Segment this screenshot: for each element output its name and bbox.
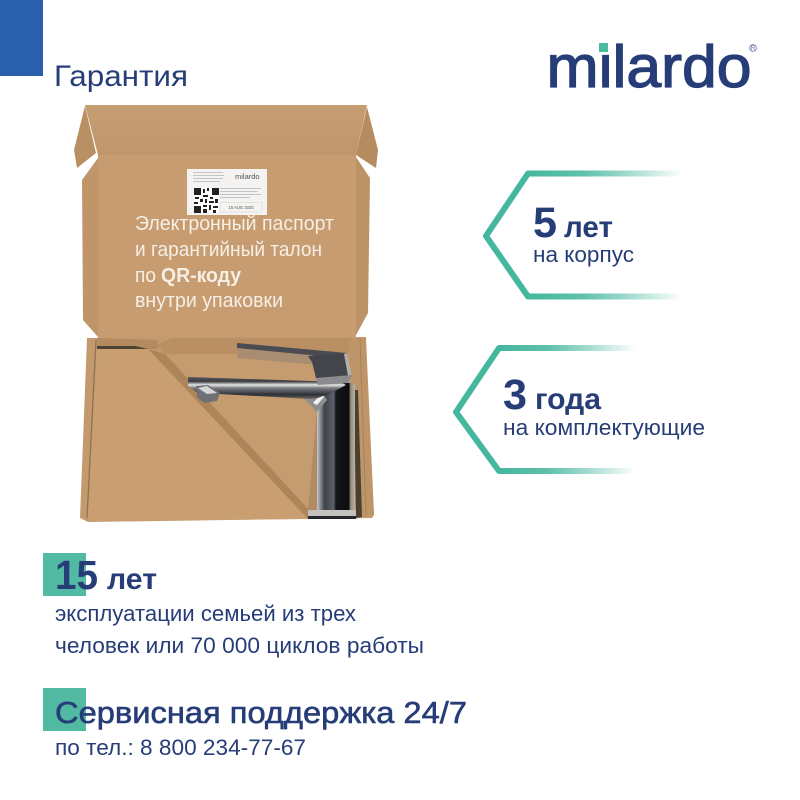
triangular cardboard insert [88, 349, 308, 521]
faucet collar [316, 375, 352, 385]
caption: on components: на комплектующие [503, 415, 705, 440]
text over lid: electronic passport: и гарантийный талон [135, 238, 322, 261]
text over lid: electronic passport: Электронный паспорт [135, 212, 335, 235]
heading unit: years: года [535, 383, 601, 416]
warranty card with QR code: milardo [235, 172, 260, 181]
phone number: по тел.: 8 800 234-77-67 [55, 735, 306, 760]
logo: milardo: milardo [546, 34, 752, 100]
left side wall of lid [82, 158, 98, 337]
heading number: 15: 15 [55, 552, 98, 598]
right wall fold [360, 338, 366, 516]
right base wall [349, 337, 374, 517]
diagonal fold [148, 349, 309, 519]
box base [80, 337, 374, 522]
heading: service support: Сервисная поддержка 24/7 [55, 695, 467, 730]
heading number: 3: 3 [503, 371, 527, 419]
caption: on body: на корпус [533, 242, 634, 267]
faucet handle body [308, 353, 352, 382]
photo: open cardboard box with faucet [74, 105, 378, 522]
badge: 5 years on body [486, 174, 682, 296]
faucet aerator [196, 385, 220, 403]
inner lid panel [98, 155, 356, 338]
text over lid: electronic passport [135, 212, 335, 312]
block: 24/7 service support [43, 688, 467, 760]
warranty card with QR code: 15 AUG 2025 [228, 205, 254, 210]
faucet [188, 343, 356, 519]
inner cardboard flap [157, 338, 353, 354]
chevron frame [486, 174, 682, 296]
chevron frame [456, 348, 636, 471]
left lid flap [74, 106, 96, 168]
box lid [85, 105, 367, 155]
warranty card with QR code [187, 169, 267, 215]
faucet body [317, 383, 355, 513]
title: Гарантия [54, 60, 188, 93]
back strip above insert [97, 338, 158, 349]
text over lid: electronic passport: по [135, 264, 156, 287]
left wall fold [87, 340, 96, 518]
text over lid: electronic passport: QR-коду [161, 264, 242, 287]
corner accent block [0, 0, 43, 76]
heading unit: years: лет [564, 211, 613, 244]
logo: milardo: R [751, 46, 756, 52]
description line 2: человек или 70 000 циклов работы [55, 633, 424, 658]
badge: 3 years on components [456, 348, 705, 471]
faucet handle reflection [237, 348, 316, 364]
heading unit: years: лет [107, 563, 157, 596]
faucet spout [188, 377, 346, 399]
faucet base [308, 510, 356, 519]
accent square [43, 688, 86, 731]
accent square [43, 553, 86, 596]
shadow behind insert corner [97, 346, 148, 349]
faucet body reflection [308, 408, 318, 512]
dark gap beside faucet [354, 390, 362, 518]
insert back panel [165, 354, 346, 517]
heading number: 5: 5 [533, 199, 557, 247]
right side wall of lid [355, 157, 370, 337]
block: 15 years of service [43, 552, 424, 658]
description line 1: эксплуатации семьей из трех [55, 601, 356, 626]
faucet handle lever [237, 343, 347, 356]
text over lid: electronic passport: внутри упаковки [135, 289, 283, 312]
right lid flap [356, 107, 378, 168]
faucet neck [303, 392, 327, 412]
